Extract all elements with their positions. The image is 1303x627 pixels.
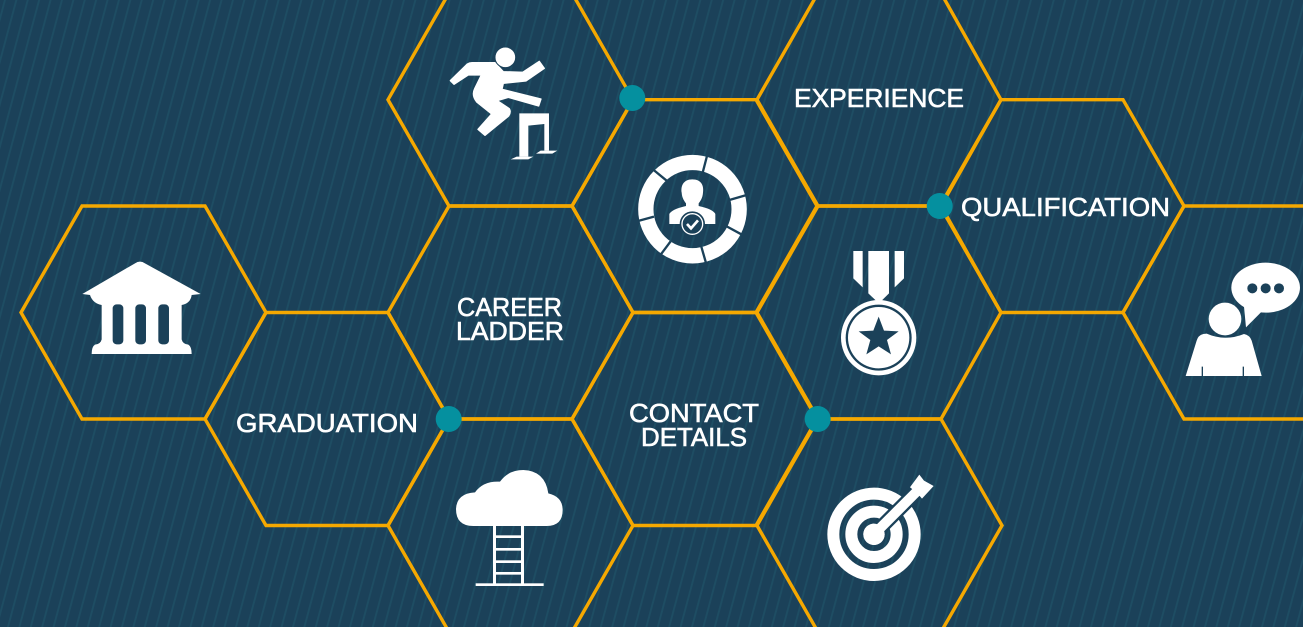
label: career ladder bbox=[456, 292, 564, 346]
label: contact details bbox=[629, 398, 759, 452]
label: contact details: DETAILS bbox=[641, 422, 747, 452]
label: experience: EXPERIENCE bbox=[794, 83, 964, 113]
icon: government building bbox=[82, 262, 201, 354]
label: qualification: QUALIFICATION bbox=[961, 192, 1170, 222]
label: career ladder: CAREER bbox=[457, 292, 562, 322]
icon: target with arrow bbox=[833, 475, 934, 575]
icon: cloud with ladder bbox=[456, 470, 563, 586]
icon: person with speech bubble bbox=[1186, 263, 1300, 376]
label: career ladder: LADDER bbox=[456, 316, 564, 346]
label: contact details: CONTACT bbox=[629, 398, 759, 428]
icon: medal with star bbox=[841, 251, 916, 375]
label: graduation: GRADUATION bbox=[236, 408, 418, 438]
icon: person in segmented ring bbox=[638, 156, 747, 263]
connector dots bbox=[436, 85, 953, 432]
icon: hurdle jumper bbox=[450, 47, 557, 159]
